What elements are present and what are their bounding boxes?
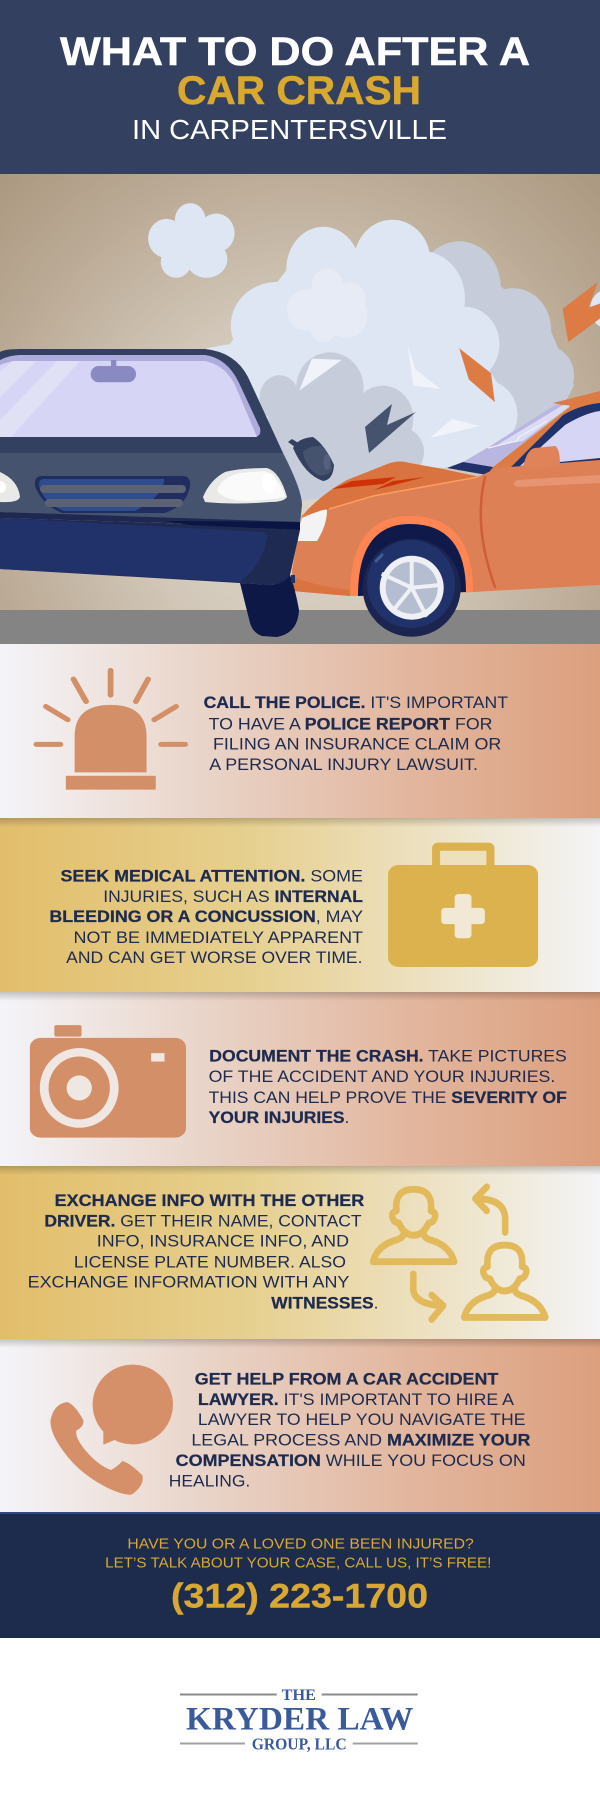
headlight — [298, 510, 327, 541]
text: exchange info: WITNESSES . — [271, 1294, 378, 1312]
text: car accident lawyer: LAWYER. IT'S IMPORTANT TO HIRE A — [198, 1391, 514, 1409]
door line — [481, 477, 495, 587]
front wheel — [363, 539, 461, 637]
rearview mirror — [91, 360, 136, 382]
bumper — [0, 512, 300, 585]
text: seek medical attention: SEEK MEDICAL ATTENTION. SOME — [60, 868, 363, 886]
panel: call the police — [0, 644, 600, 818]
text: exchange info: DRIVER. GET THEIR NAME, CONTACT — [44, 1212, 362, 1230]
text: call the police: TO HAVE A POLICE REPORT FOR — [209, 716, 493, 734]
side window — [508, 403, 600, 470]
dark shard — [365, 404, 416, 453]
text: exchange info — [28, 1192, 378, 1312]
logo: the kryder law group: KRYDER LAW — [186, 1701, 413, 1737]
orange car — [292, 391, 600, 637]
text: car accident lawyer: LAWYER TO HELP YOU NAVIGATE THE — [198, 1411, 526, 1429]
text: seek medical attention: BLEEDING OR A CONCUSSION , MAY — [49, 908, 363, 926]
roof and pillar — [480, 391, 600, 477]
text: phone number: (312) 223-1700 — [171, 1578, 428, 1616]
panel: seek medical attention — [0, 818, 600, 992]
text: document the crash — [209, 1048, 567, 1127]
icon: phone and speech bubble — [50, 1365, 173, 1495]
text: call to action invitation: LET’S TALK ABOUT YOUR CASE, CALL US, IT’S FREE! — [105, 1556, 491, 1572]
lower grey smoke — [259, 352, 424, 506]
text: exchange info: LICENSE PLATE NUMBER. ALSO — [74, 1253, 346, 1271]
front smoke cloud — [207, 220, 517, 468]
text: seek medical attention: INJURIES, SUCH AS INTERNAL — [103, 888, 363, 906]
back smoke cloud — [418, 241, 574, 456]
text: document the crash: OF THE ACCIDENT AND YOUR INJURIES. — [209, 1068, 555, 1086]
text: exchange info: EXCHANGE INFORMATION WITH ANY — [28, 1274, 349, 1292]
small smoke cloud — [148, 203, 235, 278]
logo: the kryder law group — [0, 1638, 600, 1798]
text: call the police — [204, 694, 508, 774]
panel: car accident lawyer — [0, 1339, 600, 1512]
car body — [292, 460, 600, 596]
text: seek medical attention — [49, 868, 363, 967]
wheel arch — [350, 516, 473, 596]
illustration: car crash scene — [0, 174, 600, 644]
flying side mirror — [288, 437, 334, 481]
roof — [0, 349, 283, 453]
logo: the kryder law group: GROUP, LLC — [252, 1734, 347, 1753]
hood crease — [332, 477, 396, 489]
panel: document the crash — [0, 992, 600, 1166]
header panel — [0, 0, 600, 174]
side strip — [514, 475, 600, 487]
side mirror — [523, 446, 560, 469]
smoke clouds and debris — [148, 203, 600, 506]
title line: car crash: CAR CRASH — [177, 69, 421, 113]
text: car accident lawyer: GET HELP FROM A CAR ACCIDENT — [195, 1371, 498, 1389]
text: exchange info: EXCHANGE INFO WITH THE OTHER — [55, 1192, 364, 1210]
windscreen — [463, 405, 570, 467]
logo: the kryder law group: THE — [282, 1687, 316, 1704]
text: car accident lawyer: LEGAL PROCESS AND MAXIMIZE YOUR — [191, 1432, 530, 1450]
icon: camera — [30, 1025, 186, 1138]
navy car — [0, 349, 302, 637]
text: call to action question: HAVE YOU OR A LOVED ONE BEEN INJURED? — [127, 1536, 474, 1552]
text: car accident lawyer — [169, 1371, 530, 1490]
text: document the crash: THIS CAN HELP PROVE THE SEVERITY OF — [209, 1089, 567, 1107]
highlight cloud puff — [287, 269, 367, 342]
right headlight — [203, 468, 287, 504]
text: document the crash: YOUR INJURIES . — [209, 1109, 349, 1127]
front wheel — [240, 575, 299, 637]
left headlight — [0, 472, 20, 502]
white and orange shards — [299, 282, 600, 402]
text: seek medical attention: NOT BE IMMEDIATELY APPARENT — [74, 929, 363, 947]
icon: two people exchanging — [373, 1187, 545, 1319]
text: car accident lawyer: HEALING. — [169, 1472, 250, 1490]
subtitle: in carpentersville: IN CARPENTERSVILLE — [132, 114, 447, 145]
panel: call to action — [0, 1512, 600, 1638]
windshield — [0, 355, 260, 437]
hood — [302, 462, 480, 516]
text: call the police: CALL THE POLICE. IT'S IMPORTANT — [204, 694, 508, 712]
text: document the crash: DOCUMENT THE CRASH. TAKE PICTURES — [209, 1048, 567, 1066]
icon: first aid kit — [388, 843, 538, 967]
grille — [35, 476, 190, 513]
white shard near car — [430, 419, 479, 438]
icon: siren — [36, 670, 185, 790]
text: exchange info: INFO, INSURANCE INFO, AND — [97, 1233, 349, 1251]
text: car accident lawyer: COMPENSATION WHILE YOU FOCUS ON — [176, 1452, 526, 1470]
text: call the police: A PERSONAL INJURY LAWSUIT. — [209, 756, 478, 774]
title line: what to do after a: WHAT TO DO AFTER A — [60, 30, 530, 74]
text: seek medical attention: AND CAN GET WORSE OVER TIME. — [66, 949, 362, 967]
hood — [0, 453, 302, 524]
text: call the police: FILING AN INSURANCE CLAIM OR — [213, 736, 501, 754]
panel: exchange info — [0, 1166, 600, 1339]
